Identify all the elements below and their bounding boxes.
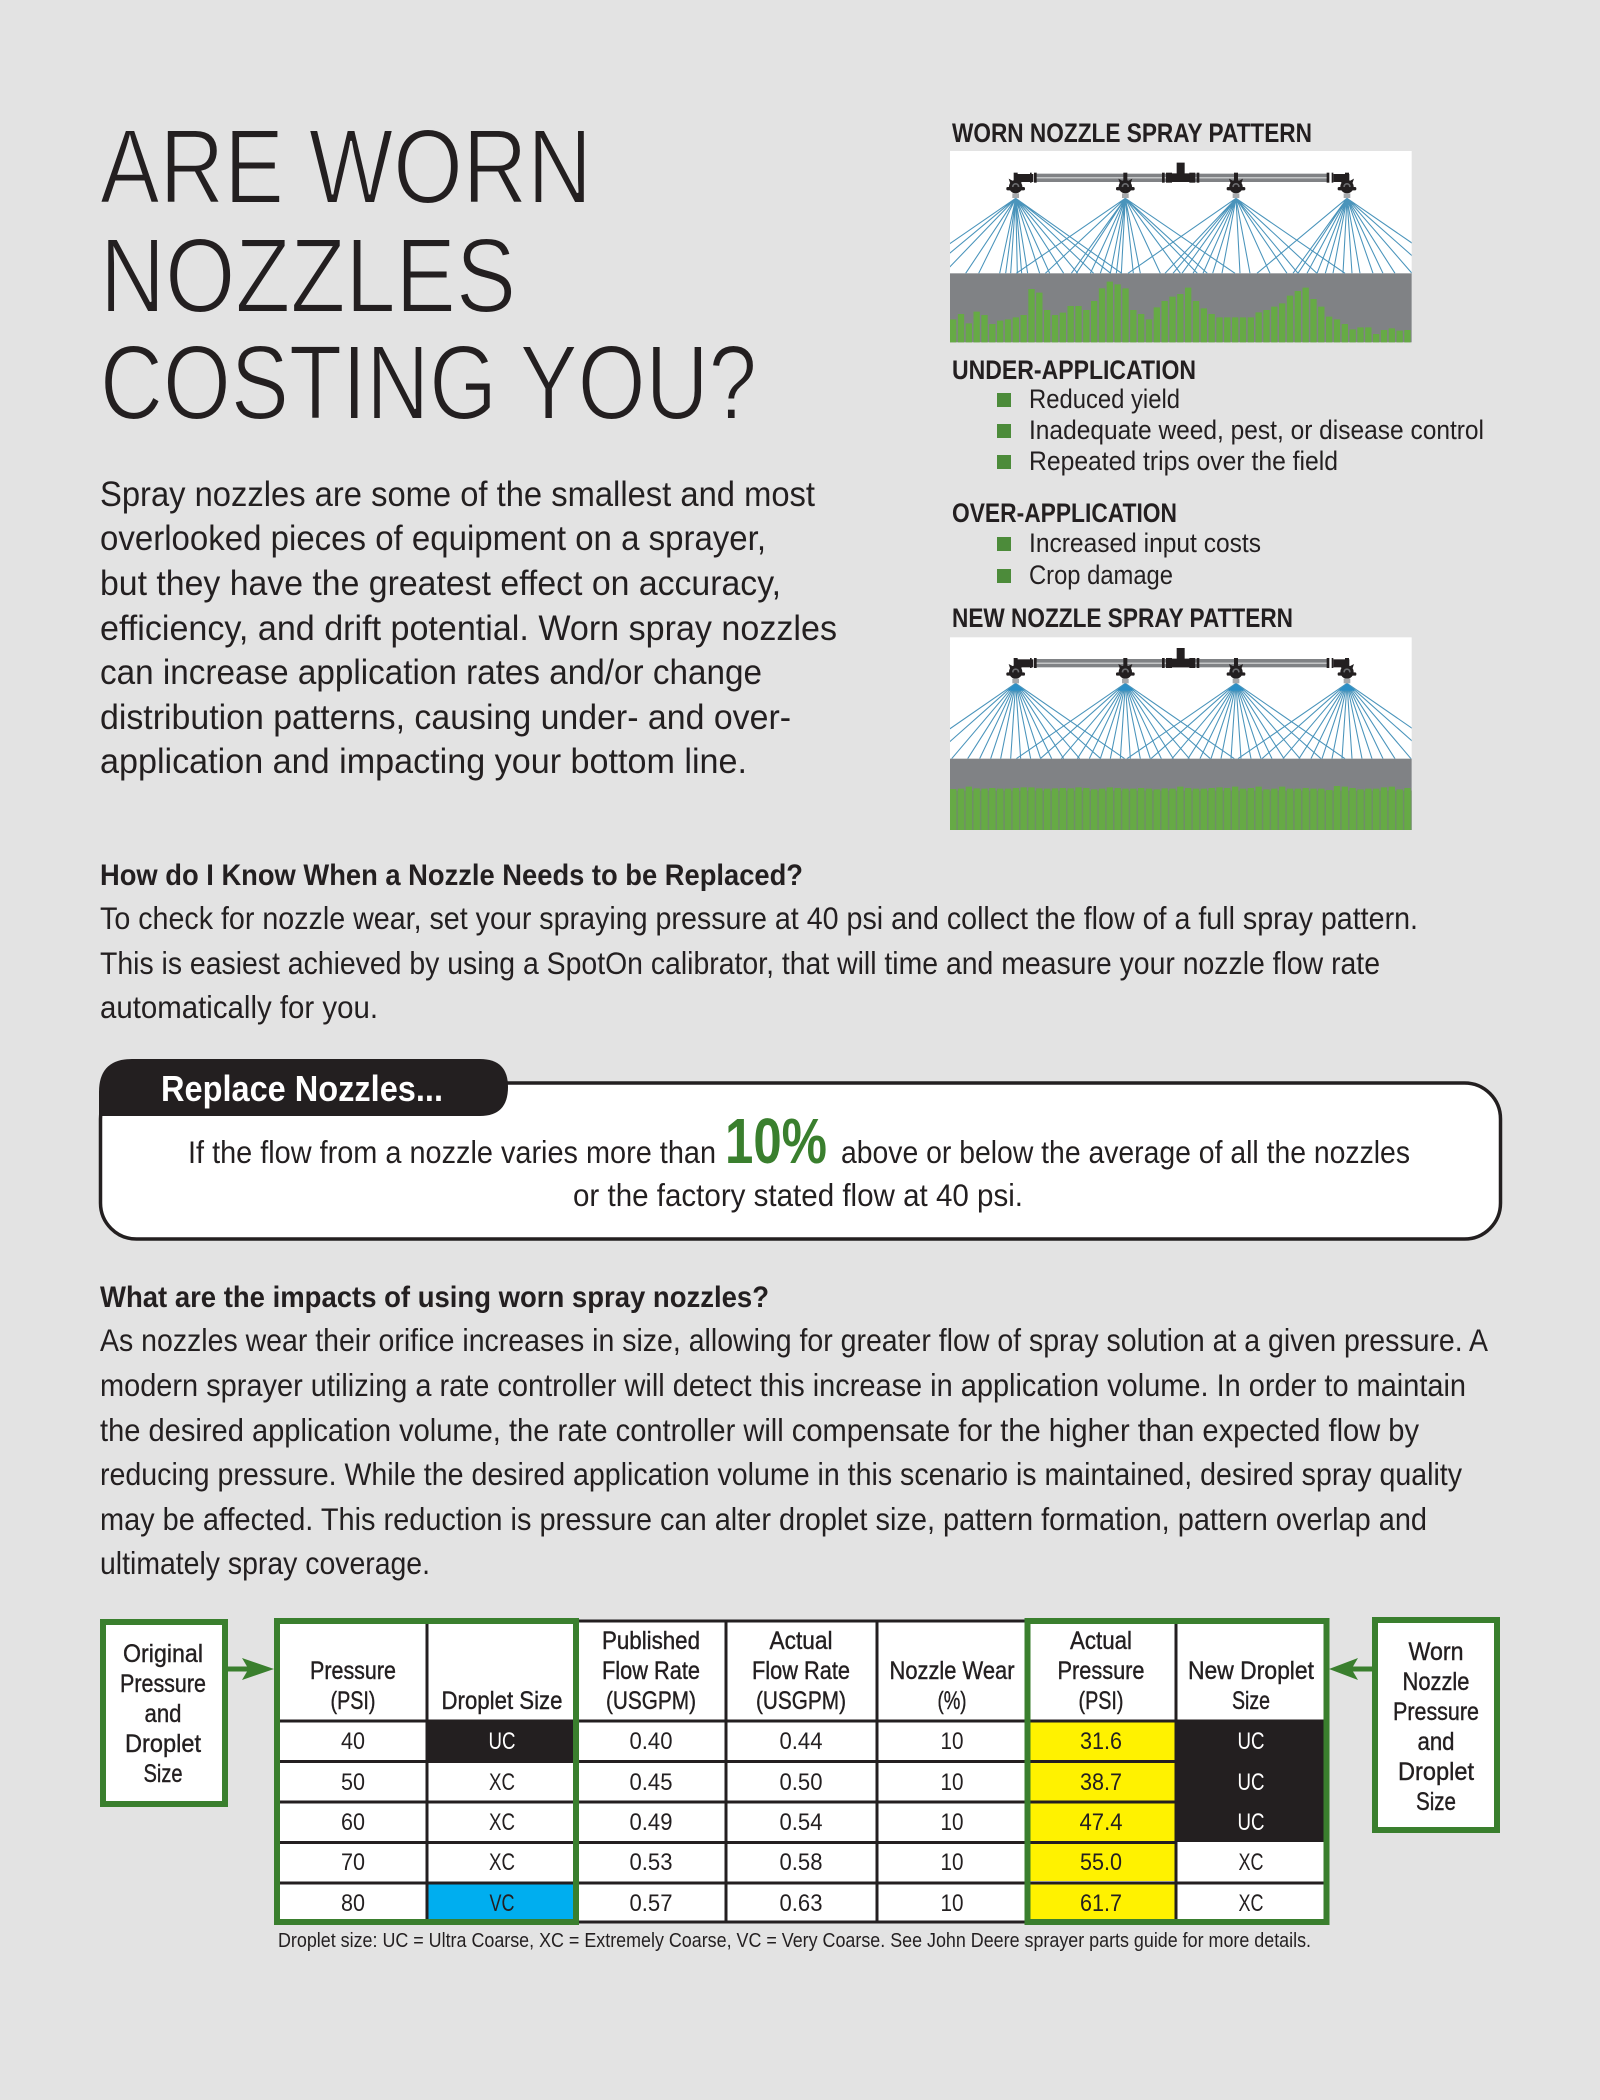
table row: 70 psi: XC [1238, 1849, 1264, 1876]
arrow: original to table [228, 1658, 274, 1680]
table header: New Droplet [1188, 1657, 1314, 1685]
table header: (USGPM) [756, 1687, 846, 1715]
table header: Flow Rate [602, 1657, 700, 1685]
callout line one [188, 1105, 1410, 1177]
heading: impacts: What are the impacts of using worn spray nozzles? [100, 1281, 769, 1314]
table row: 80 psi: VC [490, 1890, 514, 1917]
table header: (PSI) [330, 1687, 376, 1715]
intro paragraph [100, 475, 837, 781]
label box: worn nozzle pressure and droplet size: Droplet [1398, 1758, 1474, 1786]
table header: Droplet Size [442, 1687, 562, 1715]
body text: impacts: modern sprayer utilizing a rate controller will detect this increase in application volume. In order to maintain [100, 1367, 1466, 1403]
callout line one: If the flow from a nozzle varies more than [188, 1134, 716, 1170]
callout line one: 10% [725, 1105, 827, 1177]
heading: worn nozzle spray pattern: WORN NOZZLE SPRAY PATTERN [952, 118, 1312, 148]
table row: 60 psi: 0.49 [630, 1809, 672, 1836]
table header: Nozzle Wear [890, 1657, 1014, 1685]
table header: Pressure [310, 1657, 396, 1685]
table header [310, 1627, 1314, 1715]
table row: 60 psi: 0.54 [780, 1809, 822, 1836]
label box: original pressure and droplet size [103, 1622, 225, 1804]
table row: 60 psi: XC [489, 1809, 515, 1836]
section: how do I know when a nozzle needs replacing [100, 859, 1418, 1025]
table row: 60 psi: 10 [940, 1809, 964, 1836]
callout line two: or the factory stated flow at 40 psi. [573, 1177, 1023, 1213]
body text: how do I know: This is easiest achieved by using a SpotOn calibrator, that will time and measure your nozzle flow rate [100, 945, 1380, 981]
callout: replace nozzles [99, 1059, 1500, 1239]
body text: impacts: As nozzles wear their orifice increases in size, allowing for greater flow of spray solution at a given pressure. A [100, 1322, 1488, 1358]
body text: how do I know: automatically for you. [100, 989, 378, 1025]
table row: 80 psi: 80 [341, 1890, 365, 1917]
list: over-application effects: Crop damage [1029, 560, 1173, 590]
heading: under-application: UNDER-APPLICATION [952, 355, 1196, 385]
arrow: worn box to table [1329, 1658, 1372, 1680]
highlighted cells [428, 1720, 1324, 1921]
table row: 40 psi: 31.6 [1080, 1728, 1122, 1755]
table header: Actual [770, 1627, 832, 1655]
title: NOZZLES [100, 217, 516, 335]
table header: (USGPM) [606, 1687, 696, 1715]
table row: 60 psi: 60 [341, 1809, 365, 1836]
intro paragraph: efficiency, and drift potential. Worn spray nozzles [100, 609, 837, 648]
label box: worn nozzle pressure and droplet size [1375, 1620, 1497, 1830]
table row: 80 psi: XC [1238, 1890, 1264, 1917]
title: ARE WORN [100, 108, 592, 226]
table header: Published [602, 1627, 700, 1655]
table row: 40 psi: 10 [940, 1728, 964, 1755]
table row: 70 psi: 0.53 [630, 1849, 672, 1876]
table row: 70 psi: XC [489, 1849, 515, 1876]
table row: 60 psi: 47.4 [1080, 1809, 1122, 1836]
table row: 40 psi: UC [488, 1728, 516, 1755]
footnote: Droplet size: UC = Ultra Coarse, XC = Extremely Coarse, VC = Very Coarse. See John Deere sprayer parts guide for more details. [278, 1930, 1311, 1952]
diagram: new nozzle spray pattern [950, 637, 1412, 830]
heading: how do I know: How do I Know When a Nozzle Needs to be Replaced? [100, 859, 803, 892]
intro paragraph: but they have the greatest effect on accuracy, [100, 564, 781, 603]
title [100, 108, 757, 442]
list: under-application effects [997, 384, 1484, 476]
table row: 60 psi: UC [1238, 1809, 1264, 1836]
green highlight frame: worn columns [1028, 1621, 1326, 1922]
callout line one: above or below the average of all the nozzles [841, 1134, 1410, 1170]
title: COSTING YOU? [100, 324, 757, 442]
diagram: worn nozzle spray pattern [950, 151, 1412, 342]
body text: impacts: ultimately spray coverage. [100, 1545, 430, 1581]
label box: worn nozzle pressure and droplet size: and [1418, 1728, 1454, 1756]
heading: over-application: OVER-APPLICATION [952, 498, 1177, 528]
table row: 40 psi: UC [1238, 1728, 1264, 1755]
table row: 50 psi: 50 [341, 1769, 365, 1796]
list: over-application effects: Increased input costs [1029, 528, 1261, 558]
callout tab [99, 1059, 508, 1116]
table row: 70 psi: 10 [940, 1849, 964, 1876]
table row: 80 psi: 10 [940, 1890, 964, 1917]
table row: 40 psi: 0.40 [630, 1728, 672, 1755]
green highlight frame: original columns [277, 1621, 576, 1922]
label box: original pressure and droplet size: Pressure [120, 1670, 206, 1698]
table row: 70 psi [341, 1849, 1264, 1876]
label box: original pressure and droplet size: Original [123, 1640, 203, 1668]
table row: 60 psi [341, 1809, 1264, 1836]
table row: 50 psi: XC [489, 1769, 515, 1796]
table row: 50 psi: UC [1238, 1769, 1264, 1796]
table row: 40 psi [341, 1728, 1264, 1755]
table row: 50 psi: 38.7 [1080, 1769, 1122, 1796]
body text: impacts: reducing pressure. While the desired application volume in this scenario is maintained, desired spray quality [100, 1456, 1462, 1492]
label box: original pressure and droplet size: Size [144, 1760, 182, 1788]
data table [274, 1620, 1329, 1923]
table row: 50 psi [341, 1769, 1264, 1796]
table header: Pressure [1058, 1657, 1144, 1685]
table row: 80 psi [341, 1890, 1264, 1917]
intro paragraph: application and impacting your bottom line. [100, 742, 747, 781]
label box: original pressure and droplet size: Droplet [125, 1730, 201, 1758]
intro paragraph: Spray nozzles are some of the smallest and most [100, 475, 815, 514]
table row: 50 psi: 0.50 [780, 1769, 822, 1796]
table header: Actual [1070, 1627, 1132, 1655]
body text: impacts: the desired application volume, the rate controller will compensate for the higher than expected flow by [100, 1412, 1419, 1448]
label box: worn nozzle pressure and droplet size: Size [1416, 1788, 1456, 1816]
body text: how do I know: To check for nozzle wear, set your spraying pressure at 40 psi and collect the flow of a full spray pattern. [100, 900, 1418, 936]
list: under-application effects: Reduced yield [1029, 384, 1180, 414]
list: under-application effects: Repeated trips over the field [1029, 446, 1338, 476]
table row: 40 psi: 40 [341, 1728, 365, 1755]
table row: 70 psi: 55.0 [1080, 1849, 1122, 1876]
table row: 50 psi: 10 [940, 1769, 964, 1796]
table row: 80 psi: 61.7 [1080, 1890, 1122, 1917]
label box: worn nozzle pressure and droplet size: Worn [1408, 1638, 1464, 1666]
callout tab title: Replace Nozzles... [161, 1068, 443, 1109]
table row: 50 psi: 0.45 [630, 1769, 672, 1796]
heading: new nozzle spray pattern: NEW NOZZLE SPRAY PATTERN [952, 603, 1293, 633]
section: impacts of worn spray nozzles [100, 1281, 1488, 1581]
body text: how do I know [100, 900, 1418, 1025]
table row: 70 psi: 0.58 [780, 1849, 822, 1876]
table header: Flow Rate [752, 1657, 850, 1685]
table header: (PSI) [1078, 1687, 1124, 1715]
intro paragraph: can increase application rates and/or change [100, 653, 762, 692]
list: under-application effects: Inadequate weed, pest, or disease control [1029, 415, 1484, 445]
body text: impacts: may be affected. This reduction is pressure can alter droplet size, pattern formation, pattern overlap and [100, 1501, 1427, 1537]
label box: original pressure and droplet size: and [144, 1700, 182, 1728]
body text: impacts [100, 1322, 1488, 1581]
table row: 80 psi: 0.57 [630, 1890, 672, 1917]
table row: 80 psi: 0.63 [780, 1890, 822, 1917]
table header: (%) [938, 1687, 966, 1715]
table row: 40 psi: 0.44 [780, 1728, 822, 1755]
label box: worn nozzle pressure and droplet size: Pressure [1393, 1698, 1479, 1726]
table header: Size [1232, 1687, 1270, 1715]
table row: 70 psi: 70 [341, 1849, 365, 1876]
intro paragraph: distribution patterns, causing under- and over- [100, 698, 791, 737]
intro paragraph: overlooked pieces of equipment on a sprayer, [100, 519, 766, 558]
list: over-application effects [997, 528, 1261, 590]
label box: worn nozzle pressure and droplet size: Nozzle [1402, 1668, 1470, 1696]
